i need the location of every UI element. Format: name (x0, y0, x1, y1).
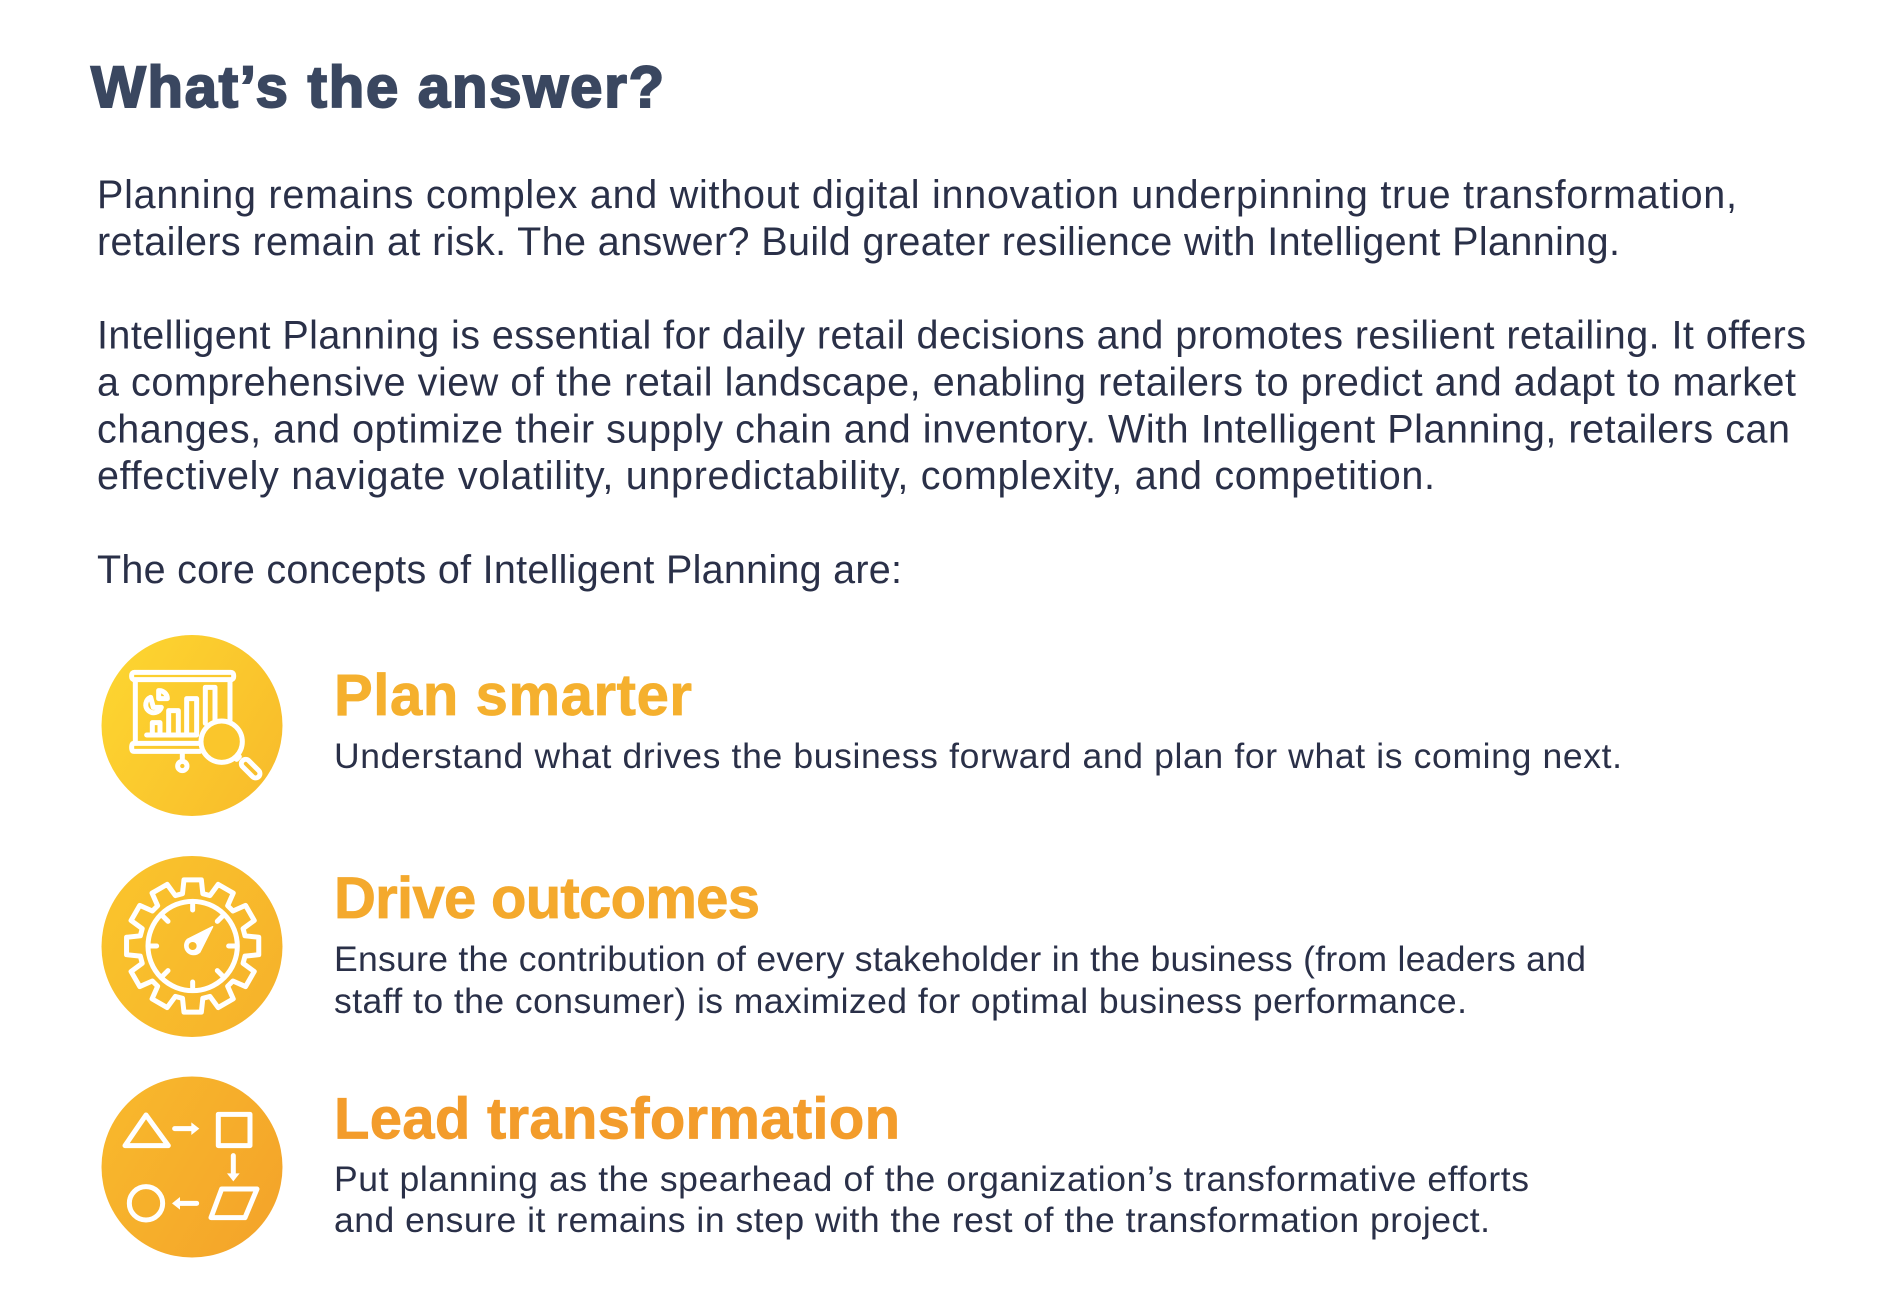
icon: process shapes with arrows (102, 1076, 282, 1258)
text: lead transformation description: and ensure it remains in step with the rest of the transformation project. (334, 1200, 1490, 1240)
text block: intelligent planning paragraph: effectively navigate volatility, unpredictability, complexity, and competition. (97, 454, 1435, 498)
panel: plan smarter (102, 635, 1622, 816)
text: lead transformation description: Put planning as the spearhead of the organization’s transformative efforts (334, 1159, 1529, 1199)
text block: intro paragraph: Planning remains complex and without digital innovation underpinning true transformation, (97, 173, 1737, 217)
text block: intelligent planning paragraph: Intelligent Planning is essential for daily retail decisions and promotes resilient retailing. It offers (97, 314, 1806, 358)
text: lead transformation description (334, 1159, 1529, 1240)
text block: intro paragraph: retailers remain at risk. The answer? Build greater resilience with Intelligent Planning. (97, 220, 1620, 264)
text: drive outcomes description: staff to the consumer) is maximized for optimal business performance. (334, 981, 1467, 1021)
panel: lead transformation (102, 1076, 1529, 1258)
title: What’s the answer? (91, 55, 664, 120)
heading: lead transformation: Lead transformation (334, 1086, 900, 1152)
text block: intelligent planning paragraph: changes, and optimize their supply chain and inventory. With Intelligent Planning, retailers can (97, 408, 1790, 452)
text: plan smarter description: Understand what drives the business forward and plan for what is coming next. (334, 736, 1622, 776)
panel: drive outcomes (102, 856, 1586, 1037)
text: drive outcomes description (334, 939, 1586, 1021)
heading: drive outcomes: Drive outcomes (334, 866, 760, 931)
text block: intelligent planning paragraph: a comprehensive view of the retail landscape, enabling retailers to predict and adapt to market (97, 360, 1796, 404)
text block: intro paragraph (97, 173, 1737, 264)
icon: presentation board with magnifier (102, 635, 282, 816)
text block: intelligent planning paragraph (97, 314, 1806, 498)
heading: plan smarter: Plan smarter (334, 663, 692, 728)
text: drive outcomes description: Ensure the contribution of every stakeholder in the business (from leaders and (334, 939, 1586, 979)
icon: gear with gauge (102, 856, 282, 1037)
text block: core concepts lead-in: The core concepts of Intelligent Planning are: (97, 548, 902, 592)
